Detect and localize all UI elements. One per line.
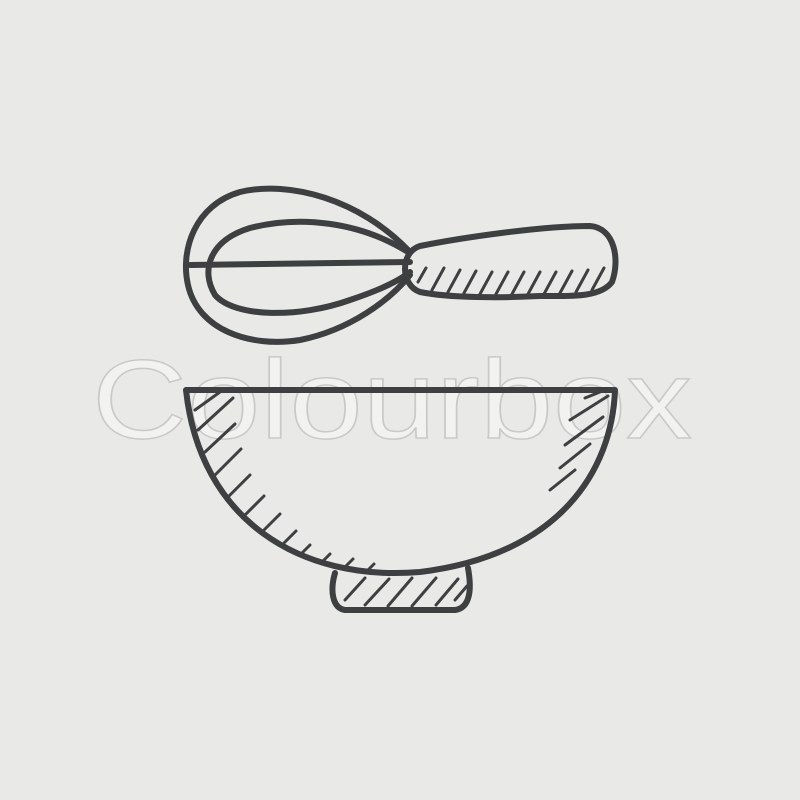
bowl shading	[195, 390, 608, 570]
whisk handle	[405, 226, 616, 297]
bowl body	[186, 390, 615, 573]
watermark: Colourbox: Colourbox	[92, 337, 692, 462]
icon: bowl	[186, 390, 615, 610]
bowl foot	[332, 568, 470, 610]
icon: whisk	[186, 189, 616, 342]
whisk wire loop	[186, 189, 410, 342]
